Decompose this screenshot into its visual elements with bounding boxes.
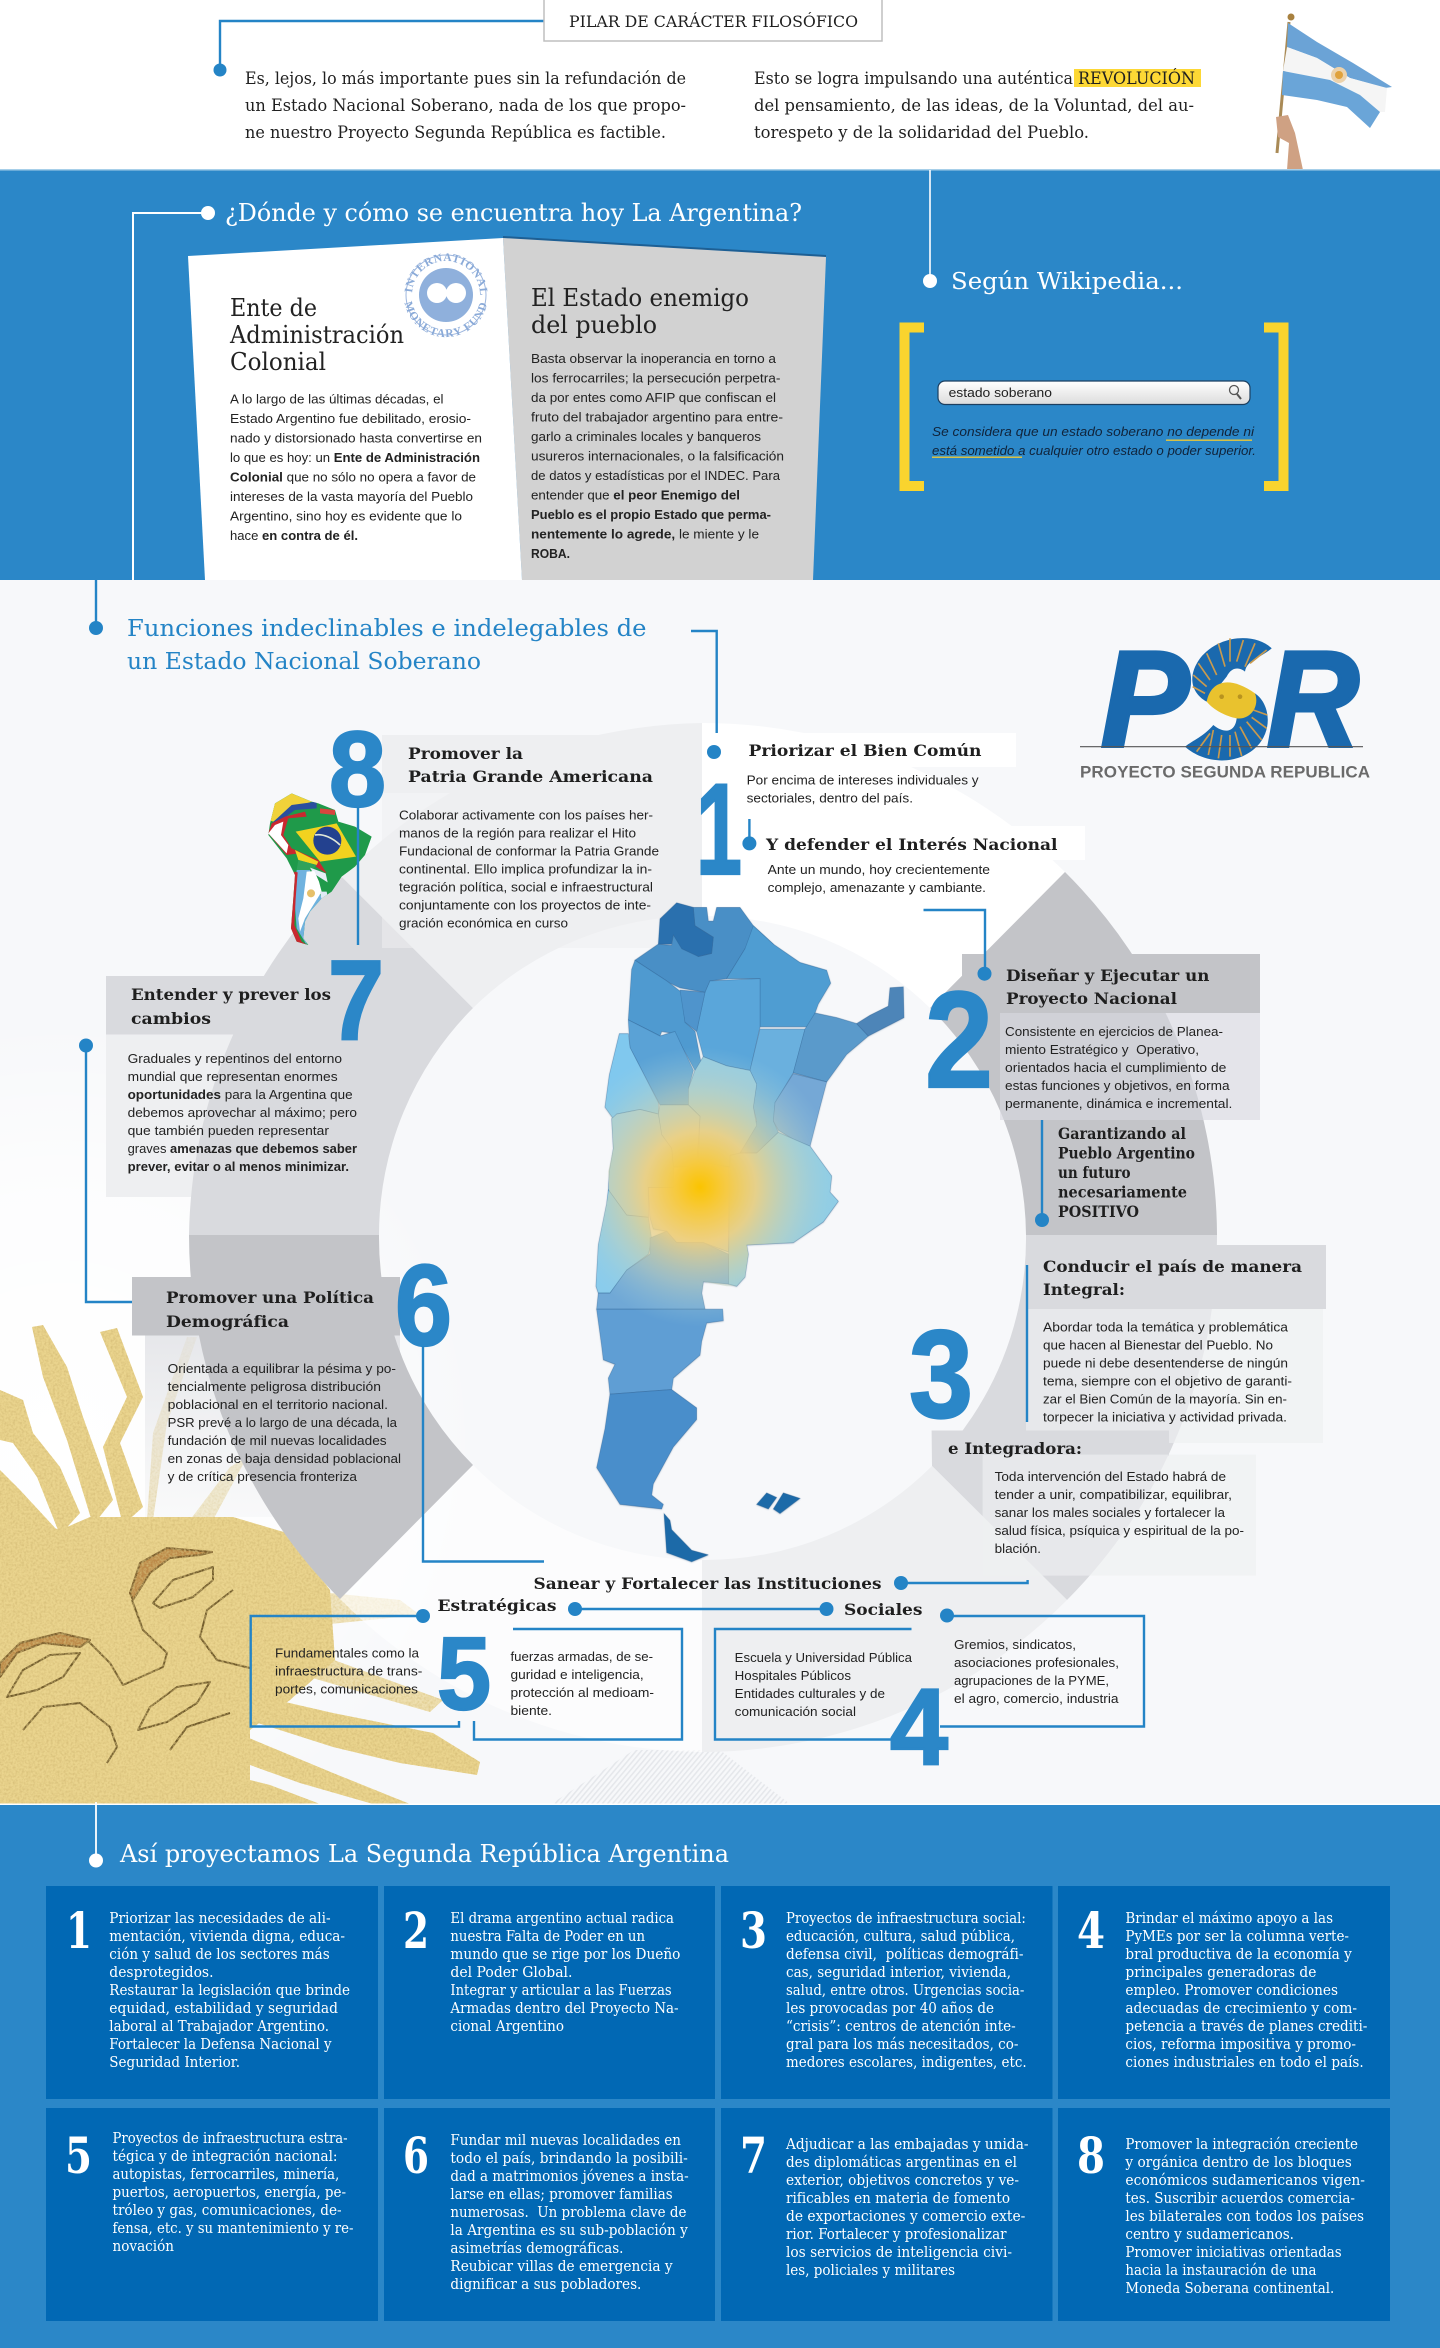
panel: función 2: Consistente en ejercicios de Planea- bbox=[1005, 1024, 1223, 1039]
icon: South America flags map bbox=[265, 790, 375, 947]
panel: función 8: Patria Grande Americana bbox=[408, 767, 653, 786]
card 1: Priorizar las necesidades de ali- bbox=[109, 1911, 331, 1927]
panel: función 3: tema, siempre con el objetivo de garanti- bbox=[1043, 1374, 1292, 1388]
panel: función 7: prever, evitar o al menos minimizar. bbox=[128, 1159, 349, 1174]
title box: PILAR DE CARÁCTER FILOSÓFICO bbox=[569, 13, 858, 31]
panel: Ente de Administración Colonial: Argentino, sino hoy es evidente que lo bbox=[230, 508, 462, 524]
body panel: promover política demográfica background bbox=[145, 1335, 400, 1517]
panel: función 4 sociales: Sociales bbox=[844, 1600, 923, 1619]
map of Argentina bbox=[560, 903, 904, 1562]
definition text bbox=[932, 425, 1256, 458]
panel: El Estado enemigo del pueblo bbox=[503, 236, 826, 580]
panel: Ente de Administración Colonial: hace en contra de él. bbox=[230, 528, 358, 543]
card 2: Armadas dentro del Proyecto Na- bbox=[449, 2001, 679, 2017]
panel: Ente de Administración Colonial: Colonial bbox=[230, 348, 326, 376]
card 6: dad a matrimonios jóvenes a insta- bbox=[450, 2169, 689, 2185]
callout: garantizando: Pueblo Argentino bbox=[1058, 1144, 1195, 1162]
search box: estado soberano bbox=[949, 386, 1052, 400]
panel: función 3: Conducir el país de manera bbox=[1043, 1257, 1302, 1276]
text block: right column: Esto se logra impulsando una auténtica bbox=[754, 69, 1073, 88]
panel: función 8: Promover la bbox=[408, 744, 523, 763]
card 4: cios, reforma impositiva y promo- bbox=[1125, 2037, 1356, 2053]
panel: función 5 estratégicas: guridad e inteligencia, bbox=[510, 1667, 644, 1682]
body panel: entender cambios background bbox=[106, 1034, 366, 1197]
card 6: la Argentina es su sub-población y bbox=[450, 2223, 689, 2239]
card 7: exterior, objetivos concretos y ve- bbox=[786, 2173, 1019, 2189]
logo: Proyecto Segunda República: P bbox=[1101, 623, 1189, 775]
card 2: del Poder Global. bbox=[450, 1965, 572, 1981]
panel: El Estado enemigo del pueblo: Basta observar la inoperancia en torno a bbox=[531, 351, 777, 366]
panel: e Integradora: blación. bbox=[995, 1541, 1041, 1556]
panel: El Estado enemigo del pueblo: nentemente lo agrede, le miente y le bbox=[531, 526, 759, 542]
number 7: 7 bbox=[328, 937, 384, 1063]
card 4 bbox=[1058, 1886, 1390, 2099]
section band: Así proyectamos bbox=[0, 1802, 1440, 2348]
section band: dónde y cómo bbox=[0, 169, 1440, 580]
panel: función 5 estratégicas: protección al medioam- bbox=[510, 1685, 654, 1700]
panel: función 7: cambios bbox=[131, 1009, 211, 1028]
icon: IMF seal: INTERNATIONAL bbox=[404, 253, 488, 295]
card 6: Reubicar villas de emergencia y bbox=[450, 2259, 673, 2275]
panel: El Estado enemigo del pueblo: El Estado enemigo bbox=[531, 284, 749, 312]
panel: El Estado enemigo del pueblo: usureros internacionales, o la falsificación bbox=[531, 448, 784, 464]
panel: función 5 estratégicas: Estratégicas bbox=[438, 1596, 557, 1615]
top section: pilar filosófico bbox=[0, 0, 1440, 170]
number 4: 4 bbox=[890, 1666, 948, 1788]
sun of May background illustration bbox=[0, 1325, 480, 1804]
panel: función 4 sociales: Entidades culturales y de bbox=[735, 1686, 885, 1701]
text block: left column: un Estado Nacional Soberano, nada de los que propo- bbox=[245, 96, 686, 115]
card 8: hacia la instauración de una bbox=[1125, 2263, 1317, 2279]
card 3: cas, seguridad interior, vivienda, bbox=[786, 1965, 1011, 1981]
panel: función 6: poblacional en el territorio nacional. bbox=[168, 1397, 388, 1412]
panel: El Estado enemigo del pueblo: entender que el peor Enemigo del bbox=[531, 488, 740, 502]
card 8: les bilaterales con todos los países bbox=[1125, 2209, 1364, 2225]
panel: función 4 sociales: Hospitales Públicos bbox=[735, 1668, 852, 1683]
card 6: dignificar a sus pobladores. bbox=[450, 2277, 641, 2293]
text block: left column: Es, lejos, lo más importante pues sin la refundación de bbox=[245, 69, 686, 88]
panel: función 6: tencialmente peligrosa distribución bbox=[168, 1379, 381, 1394]
text block: left column: ne nuestro Proyecto Segunda República es factible. bbox=[245, 123, 666, 142]
panel: e Integradora: Toda intervención del Estado habrá de bbox=[995, 1469, 1226, 1484]
callout: garantizando: necesariamente bbox=[1058, 1182, 1187, 1202]
card 3: gral para los más necesitados, co- bbox=[786, 2037, 1018, 2053]
number 6: 6 bbox=[395, 1242, 452, 1370]
text block: right column: del pensamiento, de las ideas, de la Voluntad, del au- bbox=[754, 96, 1194, 115]
segment 4 bbox=[702, 1466, 1067, 1752]
panel: Ente de Administración Colonial: Administración bbox=[229, 321, 404, 349]
icon: hand holding Argentine flag bbox=[1276, 14, 1392, 170]
panel: Ente de Administración Colonial: nado y distorsionado hasta convertirse en bbox=[230, 430, 482, 446]
panel: función 3: zar el Bien Común de la mayoría. Sin en- bbox=[1043, 1392, 1287, 1406]
card 4: empleo. Promover condiciones bbox=[1125, 1983, 1338, 1999]
heading: Así proyectamos: Así proyectamos La Segunda República Argentina bbox=[119, 1839, 729, 1868]
panel: función 8: tegración política, social e infraestructural bbox=[399, 880, 653, 894]
connector: 8 to 7 bbox=[357, 807, 359, 945]
panel: Ente de Administración Colonial: Colonial que no sólo no opera a favor de bbox=[230, 470, 476, 484]
card 7: Adjudicar a las embajadas y unida- bbox=[785, 2137, 1029, 2153]
connector: 7 to 6 bbox=[79, 1038, 132, 1302]
white glow behind sun bbox=[0, 1020, 480, 1804]
title box bbox=[544, 0, 882, 41]
card 5: tégica y de integración nacional: bbox=[112, 2149, 338, 2165]
text block: right column bbox=[754, 68, 1201, 142]
panel: Ente de Administración Colonial: Ente de bbox=[230, 294, 317, 322]
card 1: Seguridad Interior. bbox=[109, 2055, 240, 2071]
panel: función 8: manos de la región para realizar el Hito bbox=[399, 826, 636, 840]
definition text: Se considera que un estado soberano no depende ni bbox=[932, 425, 1255, 439]
panel: función 7: oportunidades para la Argentina que bbox=[128, 1087, 353, 1102]
panel: El Estado enemigo del pueblo: garlo a criminales locales y banqueros bbox=[531, 429, 762, 444]
panel: función 2 bbox=[924, 910, 1260, 1227]
panel: Según Wikipedia: Según Wikipedia... bbox=[951, 269, 1183, 295]
search box bbox=[938, 381, 1250, 404]
number 1 bbox=[696, 756, 742, 902]
panel: Ente de Administración Colonial bbox=[188, 238, 522, 580]
panel: función 8: gración económica en curso bbox=[399, 916, 568, 930]
panel: función 1: Priorizar el Bien Común bbox=[748, 741, 982, 760]
card 7 bbox=[721, 2108, 1052, 2321]
panel: función 6: Demográfica bbox=[166, 1312, 289, 1331]
card 6: numerosas. Un problema clave de bbox=[450, 2205, 686, 2221]
panel: función 4 sociales: comunicación social bbox=[735, 1704, 856, 1719]
heading: Funciones indeclinables: Funciones indeclinables e indelegables de bbox=[127, 614, 646, 642]
card 5: fensa, etc. y su mantenimiento y re- bbox=[112, 2221, 354, 2237]
panel: función 6: y de crítica presencia fronteriza bbox=[168, 1469, 358, 1484]
card 4: adecuadas de crecimiento y com- bbox=[1125, 2001, 1357, 2017]
panel: e Integradora: salud física, psíquica y espiritual de la po- bbox=[995, 1523, 1244, 1538]
connector: estratégicas to sociales bbox=[568, 1602, 834, 1616]
panel: función 1: sectoriales, dentro del país. bbox=[747, 790, 913, 806]
panel: función 6: PSR prevé a lo largo de una década, la bbox=[168, 1415, 398, 1430]
number 2: 2 bbox=[925, 964, 993, 1117]
card 4: ciones industriales en todo el país. bbox=[1125, 2055, 1364, 2071]
panel: El Estado enemigo del pueblo: de datos y estadísticas por el INDEC. Para bbox=[531, 468, 781, 483]
panel: función 3: que hacen al Bienestar del Pueblo. No bbox=[1043, 1338, 1273, 1352]
panel: función 3: puede ni debe desentenderse de ningún bbox=[1043, 1356, 1288, 1370]
panel: El Estado enemigo del pueblo: da por entes como AFIP que confiscan el bbox=[531, 390, 776, 405]
yellow brackets bbox=[904, 328, 924, 486]
card 8: centro y sudamericanos. bbox=[1125, 2227, 1294, 2243]
card 2: 2 bbox=[403, 1901, 429, 1960]
card 6: todo el país, brindando la posibili- bbox=[450, 2151, 688, 2167]
card 8: económicos sudamericanos vigen- bbox=[1125, 2173, 1365, 2189]
segment 2 bbox=[930, 872, 1217, 1235]
panel: función 8: continental. Ello implica profundizar la in- bbox=[399, 862, 652, 876]
card 8: tes. Suscribir acuerdos comercia- bbox=[1125, 2191, 1355, 2207]
card 3: salud, entre otros. Urgencias socia- bbox=[786, 1983, 1024, 1999]
number 5: 5 bbox=[437, 1616, 491, 1731]
panel: función 8: Colaborar activamente con los países her- bbox=[399, 808, 653, 822]
panel: función 1: complejo, amenazante y cambiante. bbox=[768, 880, 986, 895]
panel: Según Wikipedia bbox=[904, 269, 1284, 486]
panel: función 5 estratégicas: biente. bbox=[510, 1703, 552, 1718]
card 1: 1 bbox=[66, 1901, 92, 1960]
card 3: medores escolares, indigentes, etc. bbox=[786, 2055, 1027, 2071]
card 2: mundo que se rige por los Dueño bbox=[450, 1947, 680, 1963]
panel: función 7 bbox=[106, 937, 384, 1174]
card 7: les, policiales y militares bbox=[786, 2263, 955, 2279]
segment 6 bbox=[189, 1235, 473, 1599]
segment 1 bbox=[702, 723, 1065, 1008]
heading: Sanear y Fortalecer las Instituciones bbox=[534, 1574, 1028, 1593]
panel: función 3: torpecer la iniciativa y actividad privada. bbox=[1043, 1410, 1287, 1424]
card 1: Restaurar la legislación que brinde bbox=[109, 1983, 350, 1999]
panel: función 5 estratégicas: Fundamentales como la bbox=[275, 1646, 420, 1660]
panel: función 6: Orientada a equilibrar la pésima y po- bbox=[168, 1361, 396, 1376]
card 3: Proyectos de infraestructura social: bbox=[786, 1911, 1026, 1927]
panel: función 8: Fundacional de conformar la Patria Grande bbox=[399, 844, 659, 858]
card 5: puertos, aeropuertos, energía, pe- bbox=[112, 2185, 346, 2201]
icon: IMF seal: MONETARY FUND bbox=[404, 300, 486, 338]
panel: El Estado enemigo del pueblo: fruto del trabajador argentino para entre- bbox=[531, 410, 783, 424]
callout: garantizando bbox=[1035, 1120, 1195, 1227]
card 5: 5 bbox=[65, 2126, 92, 2185]
panel: función 3: Integral: bbox=[1043, 1280, 1125, 1299]
card 8 bbox=[1058, 2108, 1390, 2321]
card 4: bral productiva de la economía y bbox=[1125, 1947, 1353, 1963]
card 2: Integrar y articular a las Fuerzas bbox=[450, 1983, 672, 1999]
card 1: ción y salud de los sectores más bbox=[109, 1947, 330, 1963]
panel: El Estado enemigo del pueblo: del pueblo bbox=[531, 311, 657, 339]
card 3: educación, cultura, salud pública, bbox=[786, 1929, 1015, 1945]
card 4: 4 bbox=[1077, 1901, 1105, 1960]
heading: Sanear y Fortalecer las Instituciones: Sanear y Fortalecer las Instituciones bbox=[534, 1574, 882, 1593]
card 3 bbox=[721, 1886, 1052, 2099]
panel: Ente de Administración Colonial: Estado Argentino fue debilitado, erosio- bbox=[230, 411, 471, 426]
card 5: Proyectos de infraestructura estra- bbox=[112, 2131, 348, 2147]
definition text: está sometido a cualquier otro estado o poder superior. bbox=[932, 444, 1256, 458]
panel: función 4 sociales: Escuela y Universidad Pública bbox=[735, 1650, 913, 1665]
card 6: 6 bbox=[403, 2126, 429, 2185]
card 3: 3 bbox=[740, 1901, 767, 1960]
panel: función 1: Por encima de intereses individuales y bbox=[747, 772, 979, 788]
panel: función 3: Abordar toda la temática y problemática bbox=[1043, 1320, 1289, 1334]
card 1 bbox=[46, 1886, 378, 2099]
heading: dónde y cómo: ¿Dónde y cómo se encuentra hoy La Argentina? bbox=[225, 198, 802, 227]
panel: función 4 sociales: Gremios, sindicatos, bbox=[954, 1637, 1076, 1652]
card 8: Promover iniciativas orientadas bbox=[1125, 2245, 1342, 2261]
card 2: cional Argentino bbox=[450, 2019, 564, 2035]
text block: right column: REVOLUCIÓN bbox=[1078, 68, 1195, 88]
panel: función 1: Y defender el Interés Nacional bbox=[765, 835, 1058, 854]
panel: función 2: Diseñar y Ejecutar un bbox=[1006, 966, 1209, 985]
card 6 bbox=[384, 2108, 715, 2321]
logo: Proyecto Segunda República bbox=[1080, 623, 1370, 782]
heading: Funciones indeclinables bbox=[89, 580, 646, 675]
card 7: los servicios de inteligencia civi- bbox=[786, 2245, 1012, 2261]
panel: función 8 bbox=[329, 709, 702, 948]
panel: función 7: Graduales y repentinos del entorno bbox=[128, 1051, 342, 1066]
panel: función 5 estratégicas: infraestructura de trans- bbox=[275, 1664, 422, 1678]
card 6: larse en ellas; promover familias bbox=[450, 2187, 673, 2203]
chart: ring of eight functions bbox=[189, 723, 1217, 1752]
logo: Proyecto Segunda República: R bbox=[1267, 623, 1359, 775]
card 3: les provocadas por 40 años de bbox=[786, 2001, 994, 2017]
panel: función 2: permanente, dinámica e incremental. bbox=[1005, 1096, 1232, 1111]
segment 8 bbox=[342, 723, 702, 1008]
heading: Así proyectamos bbox=[89, 1802, 729, 1868]
panel: Ente de Administración Colonial: A lo largo de las últimas décadas, el bbox=[230, 392, 444, 406]
panel: función 3 bbox=[909, 1245, 1326, 1444]
card 7: de exportaciones y comercio exte- bbox=[786, 2209, 1025, 2225]
card 1: laboral al Trabajador Argentino. bbox=[109, 2019, 329, 2035]
card 5: autopistas, ferrocarriles, minería, bbox=[112, 2167, 339, 2183]
panel: Ente de Administración Colonial: lo que es hoy: un Ente de Administración bbox=[230, 450, 480, 465]
card 8: Moneda Soberana continental. bbox=[1125, 2281, 1334, 2297]
panel: función 6 bbox=[132, 1242, 452, 1484]
card 3: defensa civil, políticas demográfi- bbox=[786, 1947, 1024, 1963]
card 5: tróleo y gas, comunicaciones, de- bbox=[112, 2203, 342, 2219]
card 8: y orgánica dentro de los bloques bbox=[1124, 2155, 1352, 2171]
card 2: nuestra Falta de Poder en un bbox=[450, 1929, 645, 1945]
panel: función 4 sociales: el agro, comercio, industria bbox=[954, 1691, 1119, 1706]
number 3: 3 bbox=[909, 1306, 973, 1444]
panel: función 1 bbox=[691, 631, 1085, 902]
panel: función 2: Proyecto Nacional bbox=[1006, 989, 1177, 1008]
panel: función 7: debemos aprovechar al máximo; pero bbox=[128, 1105, 357, 1120]
panel: función 5 estratégicas: portes, comunicaciones bbox=[275, 1682, 419, 1696]
segment 3 bbox=[932, 1235, 1217, 1600]
panel: función 7: Entender y prever los bbox=[131, 985, 331, 1004]
panel: e Integradora: e Integradora: bbox=[948, 1439, 1082, 1458]
panel: función 5 estratégicas bbox=[251, 1596, 682, 1740]
icon: IMF seal bbox=[404, 253, 488, 338]
text block: right column: torespeto y de la solidaridad del Pueblo. bbox=[754, 123, 1089, 142]
panel: e Integradora: tender a unir, compatibilizar, equilibrar, bbox=[995, 1487, 1232, 1502]
panel: función 2: estas funciones y objetivos, en forma bbox=[1005, 1078, 1230, 1093]
card 1: mentación, vivienda digna, educa- bbox=[109, 1929, 345, 1945]
callout: garantizando: un futuro bbox=[1058, 1163, 1130, 1182]
segment 5 bbox=[340, 1465, 702, 1752]
number 1: 1 bbox=[696, 756, 742, 902]
panel: función 6: Promover una Política bbox=[166, 1288, 374, 1307]
card 2 bbox=[384, 1886, 715, 2099]
card 5: novación bbox=[112, 2239, 174, 2255]
panel: Ente de Administración Colonial: intereses de la vasta mayoría del Pueblo bbox=[230, 489, 473, 504]
panel: función 4 sociales: asociaciones profesionales, bbox=[954, 1655, 1119, 1670]
panel: función 2: orientados hacia el cumplimiento de bbox=[1005, 1060, 1226, 1075]
card 4: principales generadoras de bbox=[1125, 1965, 1316, 1981]
panel: función 7: mundial que representan enormes bbox=[128, 1069, 338, 1084]
number 8: 8 bbox=[329, 709, 386, 829]
panel: función 6: en zonas de baja densidad poblacional bbox=[168, 1451, 401, 1466]
card 2: El drama argentino actual radica bbox=[450, 1911, 674, 1927]
heading: Funciones indeclinables: un Estado Nacional Soberano bbox=[127, 647, 481, 675]
panel: función 6: fundación de mil nuevas localidades bbox=[168, 1433, 387, 1448]
callout: garantizando: Garantizando al bbox=[1058, 1124, 1186, 1143]
card 1: desprotegidos. bbox=[109, 1965, 214, 1981]
panel: El Estado enemigo del pueblo: los ferrocarriles; la persecución perpetra- bbox=[531, 370, 780, 386]
card 6: Fundar mil nuevas localidades en bbox=[450, 2133, 681, 2149]
card 7: des diplomáticas argentinas en el bbox=[786, 2155, 1017, 2171]
striped decoration bbox=[551, 1750, 790, 1804]
panel: función 1: Ante un mundo, hoy crecientemente bbox=[768, 862, 990, 877]
card 7: rior. Fortalecer y profesionalizar bbox=[786, 2227, 1007, 2243]
card 4: Brindar el máximo apoyo a las bbox=[1125, 1911, 1333, 1927]
panel: e Integradora bbox=[932, 1430, 1256, 1576]
card 8: 8 bbox=[1077, 2126, 1105, 2185]
panel: función 2: miento Estratégico y Operativo, bbox=[1005, 1042, 1199, 1057]
panel: función 5 estratégicas: fuerzas armadas, de se- bbox=[510, 1649, 653, 1664]
card 5 bbox=[46, 2108, 378, 2321]
panel: El Estado enemigo del pueblo: ROBA. bbox=[531, 546, 570, 561]
panel: función 8: conjuntamente con los proyectos de inte- bbox=[399, 898, 651, 912]
card 3: “crisis”: centros de atención inte- bbox=[786, 2019, 1016, 2035]
card 4: PyMEs por ser la columna verte- bbox=[1125, 1929, 1349, 1945]
text block: left column bbox=[245, 69, 686, 142]
card 7: 7 bbox=[740, 2126, 767, 2185]
segment 7 bbox=[189, 877, 473, 1235]
panel: función 4 sociales bbox=[715, 1600, 1144, 1788]
panel: función 7: que también pueden representar bbox=[128, 1123, 330, 1138]
logo: Proyecto Segunda República: PROYECTO SEGUNDA REPUBLICA bbox=[1080, 762, 1370, 782]
card 7: rificables en materia de fomento bbox=[786, 2191, 1010, 2207]
callout: garantizando: POSITIVO bbox=[1058, 1202, 1139, 1221]
panel: e Integradora: sanar los males sociales y fortalecer la bbox=[995, 1505, 1226, 1520]
panel: función 4 sociales: agrupaciones de la PYME, bbox=[954, 1673, 1109, 1688]
card 1: Fortalecer la Defensa Nacional y bbox=[109, 2037, 332, 2053]
card 8: Promover la integración creciente bbox=[1125, 2137, 1358, 2153]
card 1: equidad, estabilidad y seguridad bbox=[109, 2001, 338, 2017]
panel: El Estado enemigo del pueblo: Pueblo es el propio Estado que perma- bbox=[531, 507, 771, 522]
connector: 6 to Sanear bbox=[423, 1346, 544, 1562]
panel: función 7: graves amenazas que debemos saber bbox=[128, 1141, 357, 1156]
card 6: asimetrías demográficas. bbox=[450, 2241, 624, 2257]
card 4: petencia a través de planes crediti- bbox=[1125, 2019, 1367, 2035]
sun face lines bbox=[0, 1548, 250, 1763]
